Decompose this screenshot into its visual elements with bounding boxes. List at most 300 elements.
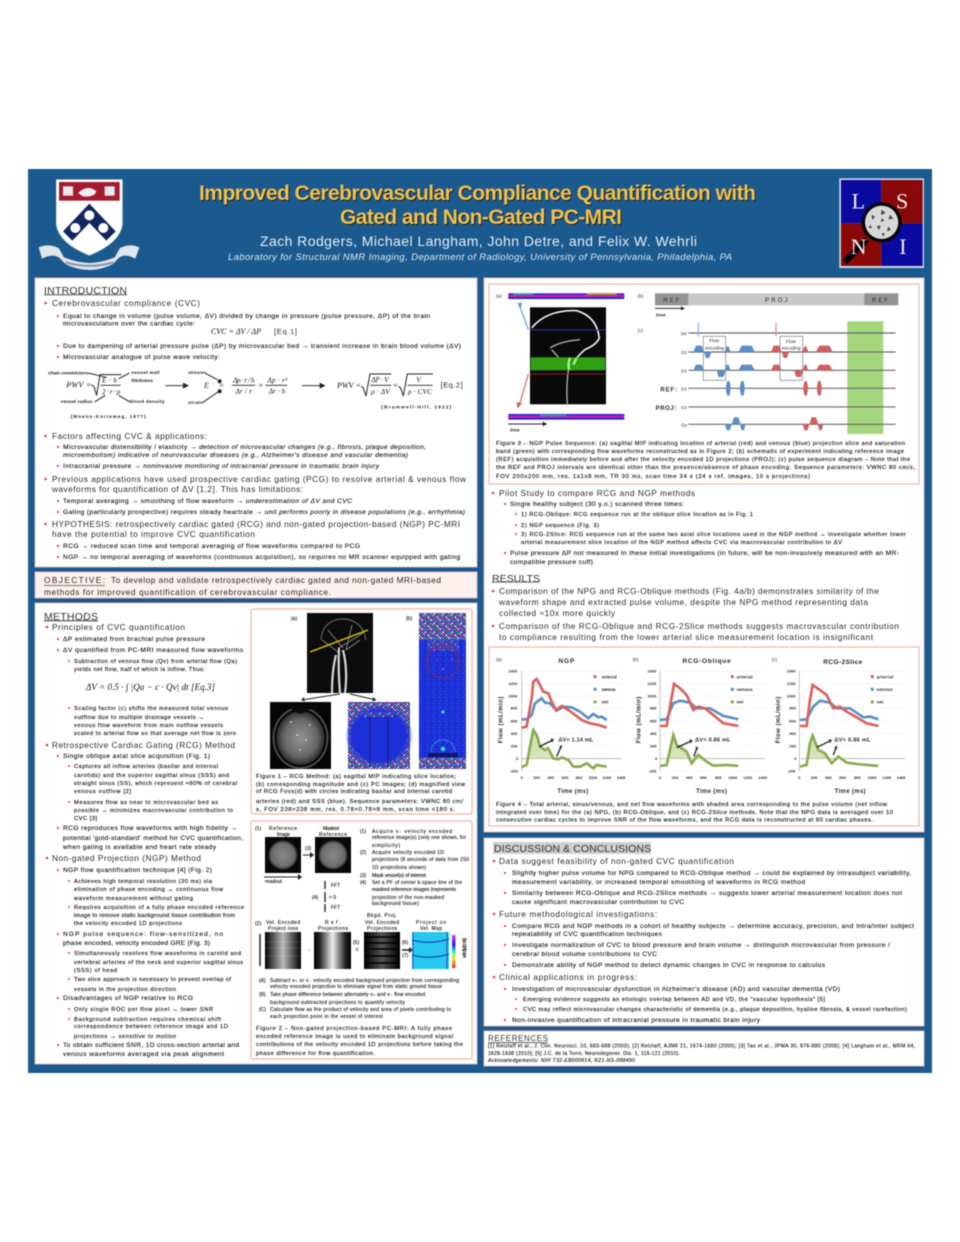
authors: Zach Rodgers, Michael Langham, John Detre, and Felix W. Wehrli (260, 233, 697, 249)
chart: NGP: 1000 (508, 693, 518, 698)
heading: methods: METHODS (44, 611, 98, 623)
text block: results: Comparison of the RCG-Oblique and RCG-2Slice methods suggests macrovascular contribution (499, 621, 899, 631)
text block: non-gated projection method: Achieves high temporal resolution (30 ms) via (74, 879, 213, 885)
chart: RCG-2Slice: 200 (811, 775, 818, 780)
text block: steps 1 to 4: masked reference images (represents (372, 887, 456, 893)
diagram: projection images: velocity (cm/s) (462, 938, 468, 958)
text block: pilot study (492, 488, 906, 566)
text block: non-gated projection method: vertebral arteries of the neck and superior sagittal sinus (74, 960, 243, 966)
equations: pulse wave velocity: PWV = (336, 381, 361, 390)
image: sagittal MIP with slice location (291, 613, 373, 693)
chart: NGP: 0 (516, 756, 519, 761)
diagram: pulse sequence: Gz (681, 368, 688, 373)
text block: cerebrovascular compliance: [Eq.1] (274, 327, 297, 336)
text block: steps 1 to 4: reference image(s) (only one shown, for (372, 835, 466, 841)
text block: principles of CVC quantification: venous flow waveform from main outflow vessels (74, 723, 223, 729)
diagram: scan timeline: REF (872, 298, 888, 304)
chart: RCG-2Slice: 800 (854, 775, 861, 780)
chart: NGP: 600 (511, 719, 518, 724)
text block: results: Comparison of the NPG and RCG-Oblique methods (Fig. 4a/b) demonstrates similarity of the (499, 586, 879, 596)
chart: RCG-2Slice: 600 (789, 719, 797, 724)
chart: RCG-2Slice: 1400 (897, 775, 906, 780)
text block: steps A to C: Calculate flow as the product of velocity and area of pixels contributing to (270, 1007, 451, 1013)
text block: hypothesis: NGP → no temporal averaging of waveforms (continuous acquisition), so requires no MR scanner equipped with gating (63, 554, 460, 561)
text block: results: to compliance resulting from the lower arterial slice measurement location is insignificant (499, 632, 874, 642)
text block: future investigations: Demonstrate ability of NGP method to detect dynamic changes in CVC in response to calculus (512, 962, 826, 969)
logo: LSNI: I (899, 234, 907, 259)
caption: figure 1: s, FOV 238×238 mm, res. 0.78×0.78×8 mm, scan time <180 s. (256, 807, 455, 813)
diagram: pulse sequence: Gz (681, 405, 688, 410)
text block: steps 1 to 4: (4) (360, 880, 366, 886)
text block: results: waveform shape and extracted pulse volume, despite the NPG method representing data (498, 597, 868, 607)
text block: pilot study: compatible pressure cuff) (510, 559, 593, 566)
text block: retrospective cardiac gating: carotids) and the superior sagittal sinus (SSS) and (74, 773, 229, 779)
chart: NGP: ΔV= 1.14 mL (558, 737, 594, 743)
text block: non-gated projection method: To obtain sufficient SNR, 1D cross-section arterial and (63, 1042, 239, 1049)
chart: RCG-Oblique: 1000 (728, 775, 738, 780)
title: Gated and Non-Gated PC-MRI (340, 206, 622, 229)
diagram: scan timeline: (b) (638, 293, 644, 298)
chart: RCG-2Slice: 200 (789, 743, 797, 748)
text block: steps 1 to 4: Acquire v₋ velocity encoded (372, 829, 452, 835)
chart: NGP: Time (ms) (557, 789, 588, 795)
chart: RCG-2Slice: venous (877, 687, 893, 692)
chart: RCG-Oblique: Flow (mL/min) (637, 697, 643, 743)
diagram: projection images: Vel. Encoded (266, 920, 300, 926)
text block: steps A to C: background subtracted projections to quantify velocity (270, 1000, 406, 1006)
diagram: projection images: (7) (402, 953, 408, 959)
equations: pulse wave velocity: E · h (101, 375, 117, 384)
text block: pilot study: Pilot Study to compare RCG and NGP methods (499, 488, 695, 498)
diagram: projection images (255, 913, 468, 969)
text block: steps A to C (259, 978, 459, 1020)
equations: pulse wave velocity: vessel radius (61, 399, 93, 405)
panel: right column upper (484, 278, 924, 832)
diagram: pulse sequence: Flow (709, 338, 720, 343)
text block: future investigations: Future methodological investigations: (499, 909, 657, 919)
poster background (28, 169, 932, 1073)
diagram: pulse sequence: (c) (638, 328, 644, 333)
text block: factors and applications: Factors affecting CVC & applications: (52, 431, 207, 441)
equations: pulse wave velocity: (Bramwell-Hill, 1922) (381, 405, 452, 411)
chart: RCG-Oblique: 400 (650, 731, 657, 736)
text block: pilot study: arterial measurement slice location of the NGP method affects CVC via macrovascular contribution to ΔV (521, 540, 842, 546)
text block: results: collected ≈10x more quickly (499, 608, 616, 618)
diagram: reference images: FFT (331, 883, 340, 889)
chart: RCG-Oblique: 800 (715, 775, 722, 780)
text block: cerebrovascular compliance (44, 298, 461, 361)
diagram: scan timeline: time (656, 312, 666, 317)
equations: pulse wave velocity: Δp · r² (266, 375, 288, 384)
text block: results (492, 586, 899, 642)
chart: RCG-Oblique: arterial (737, 674, 753, 679)
caption: figure 1: of RCG Fovx(d) with circles indicating basilar and internal carotid (256, 789, 452, 795)
diagram: projection images: (2) (255, 921, 261, 927)
logo: LSNI (839, 178, 924, 268)
chart: RCG-Oblique: ΔV= 0.86 mL (695, 737, 731, 743)
text block: principles of CVC quantification: Principles of CVC quantification (52, 622, 185, 632)
caption: figure 2: Figure 2 – Non-gated projection-based PC-MRI: A fully phase (256, 1026, 453, 1032)
text block: steps 1 to 4: background tissue) (372, 901, 419, 907)
panel: objective (35, 572, 477, 598)
chart: NGP: 1200 (602, 775, 612, 780)
text block: factors and applications (44, 431, 426, 470)
chart: NGP: -200 (510, 769, 519, 774)
image: magnified phase contrast (406, 613, 466, 769)
figure 2: NGP method (251, 821, 472, 1059)
equations: pulse wave velocity: = (258, 381, 263, 390)
diagram: projection images: Bkgd. Proj. (367, 913, 397, 919)
affiliation: Laboratory for Structural NMR Imaging, Department of Radiology, University of Pennsylvania, Philadelphia, PA (228, 252, 732, 263)
image: phase contrast slice (345, 702, 413, 769)
text block: non-gated projection method: Requires acquisition of a fully phase encoded reference (74, 905, 244, 911)
text block: steps A to C: Subtract v₊ or v₋ velocity encoded background projection from corresponding (270, 978, 459, 984)
logo: Penn shield (39, 180, 139, 270)
diagram: projection images: Project on (416, 920, 446, 926)
title (199, 182, 757, 230)
text block: reference list: [1] Retzlaff et al., J. Clin. Neurosci. 10, 683-688 (2003); [2] Retzlaff, AJNR 21, 1674-1680 (2000); [3] Tan et al., JPMA 30, 876-880 (2008); [4] Langham et al., MRM 64, (488, 1044, 915, 1050)
chart: RCG-Oblique: Time (ms) (696, 789, 727, 795)
text block: hypothesis: HYPOTHESIS: retrospectively cardiac gated (RCG) and non-gated projection-based (NGP) PC-MRI (52, 519, 460, 529)
chart: RCG-Oblique: 0 (659, 775, 662, 780)
figure 3: NGP pulse sequence (489, 284, 919, 484)
caption: figure 1: (b) corresponding magnitude and (c) PC images; (d) magnified view (256, 782, 466, 788)
text block: reference list: 1628-1638 (2010); [5] J.C. de la Torre, Neurodegener. Dis. 1, 116-121 (2010). (488, 1051, 680, 1057)
chart: NGP: 200 (533, 775, 541, 780)
caption: figure 1 (256, 774, 466, 813)
text block: steps 1 to 4: (2) (360, 850, 366, 856)
text block: steps A to C: Take phase difference between alternately v₊ and v₋ flow encoded (270, 992, 425, 998)
text block: principles of CVC quantification: yields net flow, half of which is inflow. Thus: (74, 667, 205, 673)
caption: figure 2: encoded reference image is used to eliminate background signal (256, 1034, 453, 1040)
diagram: pulse sequence (638, 321, 896, 434)
text block: non-gated projection method: projections → sensitive to motion (74, 1034, 176, 1040)
text block: pilot study: 2) NGP sequence (Fig. 3) (521, 523, 599, 529)
diagram: pulse sequence: RF (681, 331, 687, 336)
text block: previous applications (44, 474, 467, 516)
text block: feasibility: measurement variability, or increased temporal smoothing of waveforms in RCG method (512, 879, 805, 886)
text block: non-gated projection method (46, 853, 244, 1058)
text block: retrospective cardiac gating (46, 740, 243, 851)
text block: clinical applications: Investigation of microvascular dysfunction in Alzheimer's disease (AD) and vascular dementia (VD) (512, 986, 840, 993)
diagram: pulse sequence: Gz (681, 350, 688, 355)
text block: cerebrovascular compliance: Microvascular analogue of pulse wave velocity: (63, 354, 220, 361)
chart: RCG-2Slice: 1200 (882, 775, 892, 780)
text block: steps 1 to 4: projections (8 seconds of data from 250 (372, 857, 469, 863)
chart: RCG-Oblique: 1400 (647, 668, 657, 673)
text block: clinical applications (493, 972, 907, 1024)
chart: NGP: 400 (547, 775, 555, 780)
chart: RCG-Oblique: 0 (655, 756, 658, 761)
text block: steps A to C: (B) (259, 992, 266, 998)
text block: retrospective cardiac gating: Measures flow as near to microvascular bed as (74, 800, 218, 806)
equations: pulse wave velocity: ΔP · V (370, 375, 390, 384)
heading: introduction: INTRODUCTION (44, 285, 127, 297)
chart: RCG-Oblique: 200 (650, 743, 657, 748)
equations: pulse wave velocity: (Moens-Korteweg, 1877) (71, 414, 146, 420)
heading: discussion and conclusions: DISCUSSION & CONCLUSIONS (494, 843, 651, 855)
diagram: reference images: Image (277, 832, 290, 838)
text block: steps A to C: velocity encoded projection to eliminate signal from static ground tissue (270, 984, 442, 990)
diagram: pulse sequence: encoding (705, 346, 724, 351)
text block: previous applications: Gating (particularly prospective) requires steady heartrate → unit performs poorly in disease populations (e.g., arrhythmia) (63, 509, 465, 516)
equations: pulse wave velocity: strain (188, 400, 203, 406)
chart: NGP: 0 (521, 775, 524, 780)
diagram: reference images: Reference (319, 832, 347, 838)
chart: NGP: 400 (511, 731, 518, 736)
diagram: projection images: Projections (367, 926, 398, 932)
text block: previous applications: Temporal averaging → smoothing of flow waveform → underestimation of ΔV and CVC (63, 498, 352, 505)
chart: NGP: 1200 (508, 681, 518, 686)
chart: NGP: (a) (496, 657, 502, 662)
text block: pilot study: 3) RCG-2Slice: RCG sequence run at the same two axial slice locations used in the NGP method → investigate whether lower (521, 532, 906, 538)
chart: RCG-Oblique: RCG-Oblique (682, 658, 731, 665)
title: Gated and Non-Gated PC-MRI (341, 207, 623, 230)
chart: RCG-2Slice: net (877, 700, 884, 705)
text block: non-gated projection method: the velocity encoded 1D projections (74, 921, 182, 927)
text block: steps 1 to 4: Set a PF of center k-space line of the (372, 880, 462, 886)
text block: cerebrovascular compliance: microvasculature over the cardiac cycle: (63, 320, 195, 328)
diagram: reference images: = 0 (329, 895, 336, 901)
text block: retrospective cardiac gating: RCG reproduces flow waveforms with high fidelity → (63, 825, 237, 832)
equations: pulse wave velocity: Δr / r (234, 386, 252, 395)
text block: non-gated projection method: vessels in the projection direction (74, 987, 176, 993)
image: sagittal MIP with projection strips (496, 293, 624, 432)
text block: steps 1 to 4: (1) (360, 829, 366, 835)
chart: NGP: net (602, 700, 609, 705)
diagram: scan timeline: REF (663, 298, 680, 304)
chart: RCG-2Slice: 1000 (868, 775, 877, 780)
text block: factors and applications: microembolism) indicative of neurovascular diseases (e.g., Alzheimer's disease and vascular dementia) (63, 452, 408, 459)
diagram: projection images: Vel. Map (420, 926, 442, 932)
text block: hypothesis (44, 519, 460, 561)
text block: hypothesis: have the potential to improve CVC quantification (52, 529, 255, 539)
text block: feasibility: Slightly higher pulse volume for NPG compared to RCG-Oblique method → could be explained by intrasubject variability, (512, 870, 911, 877)
diagram: pulse sequence: Gz (681, 386, 688, 391)
text block: retrospective cardiac gating: possible → minimizes macrovascular contribution to (74, 808, 233, 814)
text block: cerebrovascular compliance: CVC = ΔV / ΔP (211, 327, 261, 336)
chart: NGP (496, 657, 626, 795)
text block: non-gated projection method: correspondence between reference image and 1D (74, 1024, 228, 1030)
text block: retrospective cardiac gating: potential 'gold-standard' method for CVC quantification, (63, 835, 243, 842)
text block: feasibility: Similarity between RCG-Oblique and RCG-2Slice methods → suggests lower arterial measurement location does not (512, 890, 902, 897)
text block: steps A to C: (C) (259, 1007, 266, 1013)
equations: pulse wave velocity: chain constrictors (48, 371, 88, 377)
panel: references (484, 1031, 924, 1066)
text block: steps 1 to 4: Acquire velocity encoded 1D (372, 850, 444, 856)
chart: RCG-2Slice: ΔV= 0.86 mL (834, 737, 871, 743)
text block: cerebrovascular compliance: Cerebrovascular compliance (CVC) (52, 298, 200, 308)
chart: RCG-2Slice: 0 (794, 756, 797, 761)
caption: figure 3: Figure 3 – NGP Pulse Sequence: (a) sagittal MIP indicating location of arterial (red) and venous (blue) projection slice and saturation (496, 441, 905, 447)
equations: pulse wave velocity: blood density (130, 399, 165, 405)
image: sagittal MIP with projection strips: time (510, 427, 520, 432)
chart: RCG-2Slice: 400 (825, 775, 832, 780)
text block: retrospective cardiac gating: straight sinus (SS), which represent ≈80% of cerebral (74, 781, 237, 787)
caption: figure 3: band (green) with corresponding flow waveforms reconstructed as in Figure 2; (b) schematic of experiment indicating reference image (496, 449, 905, 455)
text block: principles of CVC quantification: ΔV quantified from PC-MRI measured flow waveforms (63, 647, 244, 654)
equations: pulse wave velocity: E = (203, 381, 224, 390)
equations: pulse wave velocity: Δp · r / h (232, 375, 255, 384)
text block: principles of CVC quantification: Subtraction of venous flow (Qv) from arterial flow (Qa) (74, 659, 237, 665)
text block: principles of CVC quantification: scaled to arterial flow so that average net flow is zero (74, 731, 236, 737)
diagram: projection images: Ref. (325, 920, 341, 926)
chart: NGP: 1000 (588, 775, 598, 780)
chart: RCG-2Slice: 1400 (787, 668, 796, 673)
diagram: projection images: = (355, 947, 359, 954)
caption: figure 2: phase difference for flow quantification. (256, 1051, 375, 1057)
title: Improved Cerebrovascular Compliance Quantification with (199, 182, 756, 205)
caption: figure 3: the REF and PROJ intervals are identical other than the presence/absence of phase encoding. Sequence parameters: VWNC 80 cm/s, (496, 465, 915, 471)
text block: steps 1 to 4: simplicity) (372, 843, 400, 849)
text block: principles of CVC quantification: ΔP estimated from brachial pulse pressure (63, 636, 205, 643)
chart: RCG-2Slice: RCG-2Slice (823, 659, 863, 666)
text block: feasibility: Data suggest feasibility of non-gated CVC quantification (499, 856, 734, 866)
caption: figure 1: Figure 1 – RCG Method: (a) sagittal MIP indicating slice location; (256, 774, 456, 780)
text block: steps 1 to 4: Mask vessel(s) of interest (372, 873, 427, 879)
diagram: projection images: Project ions (268, 926, 298, 932)
diagram: scan timeline: PROJ (765, 298, 788, 304)
equations: pulse wave velocity: vessel wall (131, 370, 160, 376)
text block: future investigations (493, 909, 914, 969)
chart: NGP: 200 (511, 743, 518, 748)
figure 4: flow waveforms (489, 647, 919, 826)
diagram: projection images: (6) (402, 940, 408, 946)
logo: LSNI: L (852, 189, 865, 214)
text block: principles of CVC quantification: outflow due to multiple drainage vessels → (74, 715, 204, 721)
text block: non-gated projection method: NGP pulse sequence: flow-sensitized, no (63, 931, 223, 938)
text block: steps 1 to 4: 1D projections shown) (372, 865, 426, 871)
diagram: projection images: Vel. Encoded (365, 920, 399, 926)
caption: figure 3: (REF) acquisition immediately before and after the velocity encoded 1D projections (PROJ); (c) pulse sequence diagram – Note that the (496, 457, 911, 463)
equations: pulse wave velocity: V (416, 375, 422, 384)
chart: RCG-Oblique: 600 (650, 719, 657, 724)
text block: steps 1 to 4 (360, 829, 469, 907)
diagram: pulse sequence: encoding (782, 346, 801, 351)
panel: discussion and conclusions (484, 838, 924, 1026)
text block: feasibility (493, 856, 911, 906)
chart: RCG-2Slice: 0 (798, 775, 801, 780)
heading: references: REFERENCES (488, 1034, 548, 1043)
equations: pulse wave velocity: Δr · h (268, 386, 286, 395)
diagram: reference images: (1) (255, 826, 261, 832)
caption: figure 4: Figure 4 – Total arterial, sinus/venous, and net flow waveforms with shaded area corresponding to the pulse volume (net inflow (496, 802, 888, 808)
chart: NGP: 1400 (508, 668, 518, 673)
chart: RCG-2Slice: 1200 (787, 681, 796, 686)
chart: RCG-2Slice: Time (ms) (835, 789, 866, 795)
panel: objective: methods for improved quantification of cerebrovascular compliance. (44, 587, 331, 597)
caption: figure 4: consecutive cardiac cycles to improve SNR of the flow waveforms, and the RCG data is reconstructed at 80 cardiac phases. (496, 818, 873, 824)
chart: RCG-2Slice: 1000 (787, 693, 796, 698)
text block: non-gated projection method: waveform measurement without gating (73, 896, 193, 902)
caption: figure 2: contributions of the velocity encoded 1D projections before taking the (256, 1042, 464, 1048)
text block: non-gated projection method: Two slice approach is necessary to prevent overlap of (74, 977, 231, 983)
equations: pulse wave velocity: ρ · ΔV (370, 387, 391, 396)
chart: RCG-Oblique: 200 (672, 775, 679, 780)
chart: NGP: arterial (602, 674, 617, 679)
figure 1: RCG method (251, 609, 472, 814)
logo: LSNI: S (896, 189, 908, 214)
text block: pilot study: Single healthy subject (30 y.o.) scanned three times: (510, 501, 684, 508)
text block: feasibility: cause significant macrovascular contribution to CVC (512, 899, 684, 906)
caption: figure 4: integrated over time) for the (a) NPG, (b) RCG-Oblique, and (c) RCG-2Slice methods. Note that the NPG data is averaged over 10 (496, 810, 894, 816)
text block: cerebrovascular compliance: Due to dampening of arterial pressure pulse (ΔP) by microvascular bed → transient increase in brain blood volume (ΔV) (63, 343, 461, 350)
equations: pulse wave velocity (48, 370, 463, 420)
text block: non-gated projection method: venous waveforms averaged via peak alignment (63, 1051, 224, 1058)
image: sagittal MIP with slice location: (a) (291, 616, 297, 622)
diagram: projection images: (5) (353, 940, 359, 946)
text block: previous applications: waveforms for quantification of ΔV [1,2]. This has limitations: (51, 484, 303, 494)
diagram: pulse sequence: REF: (660, 387, 677, 393)
text block: principles of CVC quantification (46, 622, 244, 737)
caption: figure 1: arteries (red) and SSS (blue). Sequence parameters: VWNC 80 cm/ (256, 799, 463, 805)
text block: previous applications: Previous applications have used prospective cardiac gating (PCG) to resolve arterial & venous flow (52, 474, 467, 484)
arrows from MIP to slices (301, 694, 376, 702)
diagram: pulse sequence: Gy (681, 422, 688, 427)
chart: NGP: NGP (558, 658, 575, 665)
diagram: reference images: (4) (312, 895, 318, 901)
chart: RCG-2Slice (772, 657, 906, 795)
equations: pulse wave velocity: thickness (131, 378, 153, 384)
chart: NGP: 600 (562, 775, 569, 780)
panel: methods (35, 603, 477, 1064)
chart: NGP: venous (602, 687, 616, 692)
chart: RCG-2Slice: 800 (789, 706, 797, 711)
caption: figure 4 (496, 802, 894, 824)
title: Improved Cerebrovascular Compliance Quantification with (200, 183, 757, 206)
image: sagittal MIP with projection strips: (a) (496, 293, 502, 298)
text block: pilot study: 1) RCG-Oblique: RCG sequence run at the oblique slice location as in Fig. 1 (521, 512, 753, 518)
text block: steps A to C: (A) (259, 978, 266, 984)
text block: retrospective cardiac gating: venous outflow [2] (74, 789, 131, 795)
text block: clinical applications: Emerging evidence suggests an etiologic overlap between AD and VD, the “vascular hypothesis” [5] (523, 997, 825, 1003)
text block: non-gated projection method: Only single ROC per flow pixel → lower SNR (74, 1007, 214, 1013)
equations: pulse wave velocity: ρ · CVC (407, 387, 432, 396)
text block: cerebrovascular compliance: Equal to change in volume (pulse volume, ΔV) divided by change in pressure (pulse pressure, ΔP) of the brain (63, 313, 430, 320)
text block: retrospective cardiac gating: when gating is available and heart rate steady (62, 844, 217, 851)
text block: reference list (487, 1044, 915, 1064)
chart: RCG-Oblique: net (737, 700, 744, 705)
text block: non-gated projection method: image to remove static background tissue contribution from (74, 913, 235, 919)
diagram: projection images: - (308, 948, 310, 954)
text block: clinical applications: Non-invasive quantification of intracranial pressure in traumatic brain injury (512, 1017, 761, 1024)
caption: figure 2 (256, 1026, 464, 1057)
chart: RCG-2Slice: (c) (772, 657, 778, 662)
text block: future investigations: repeatability of CVC quantification techniques (512, 931, 663, 938)
panel: introduction (35, 278, 477, 567)
diagram: pulse sequence: PROJ: (656, 406, 676, 412)
text block: retrospective cardiac gating: Captures all inflow arteries (basilar and internal (74, 764, 218, 770)
text block: clinical applications: Clinical applications in progress: (499, 972, 637, 982)
image: magnitude slice (270, 702, 331, 769)
chart: RCG-Oblique: 1200 (647, 681, 657, 686)
diagram: pulse sequence: Flow (786, 339, 796, 344)
text block: non-gated projection method: NGP flow quantification technique [4] (Fig. 2) (63, 867, 212, 874)
diagram: reference images: (3) (305, 846, 311, 852)
diagram: scan timeline (638, 293, 898, 317)
diagram: reference images (255, 826, 351, 912)
chart: RCG-Oblique: 800 (650, 706, 657, 711)
text block: future investigations: Investigate normalization of CVC to blood pressure and brain volume → distinguish microvascular from pressure / (512, 942, 890, 949)
text block: retrospective cardiac gating: Single oblique axial slice acquisition (Fig. 1) (63, 753, 210, 760)
diagram: reference images: Masked (323, 826, 339, 832)
text block: non-gated projection method: Non-gated Projection (NGP) Method (52, 853, 201, 863)
chart: RCG-2Slice: -200 (787, 769, 796, 774)
chart: NGP: 800 (511, 706, 518, 711)
chart: NGP: 800 (576, 775, 583, 780)
chart: RCG-2Slice: 400 (789, 731, 797, 736)
heading: results: RESULTS (492, 573, 540, 585)
